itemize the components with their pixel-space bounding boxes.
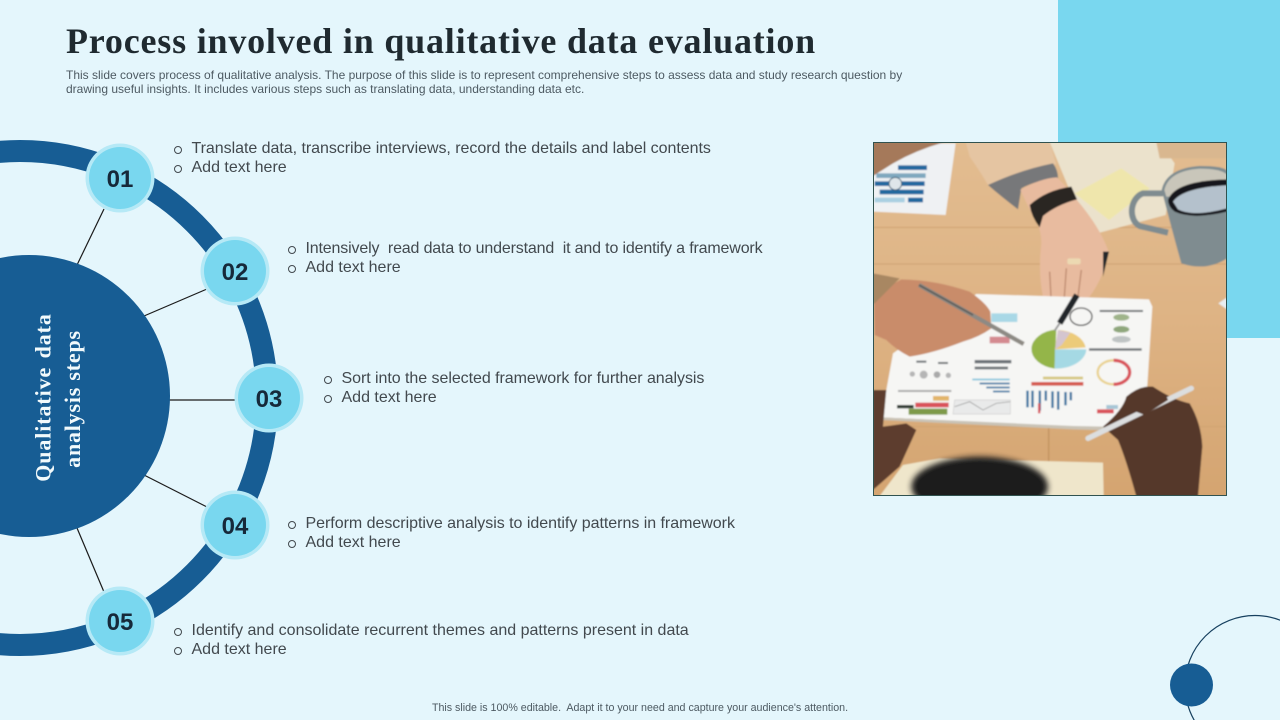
description text bbox=[66, 68, 902, 96]
step badge 03 bbox=[234, 364, 304, 432]
step badge 02 bbox=[200, 236, 270, 306]
top-left report bbox=[873, 143, 956, 215]
decorative circle outline bbox=[1170, 614, 1280, 720]
step badge 04: 04 bbox=[222, 513, 249, 540]
outer ring bbox=[0, 151, 267, 645]
step 4 text bbox=[288, 515, 735, 551]
main chart sheet bbox=[881, 294, 1152, 427]
foreground paper and head bbox=[880, 458, 1104, 496]
pointer pen bbox=[1060, 295, 1077, 323]
white object at right edge bbox=[1218, 297, 1227, 309]
step 3 text: Sort into the selected framework for further analysis bbox=[342, 370, 704, 387]
lower right hand with pen bbox=[1103, 386, 1202, 497]
step 3 text bbox=[324, 370, 704, 406]
step badge 01 bbox=[86, 144, 154, 212]
radial diagram: analysis steps bbox=[60, 330, 85, 468]
photo: hands reviewing charts on a wooden table bbox=[873, 142, 1227, 496]
central label: Qualitative data bbox=[30, 313, 56, 482]
step 4 text: Add text here bbox=[306, 534, 401, 551]
step 2 text: Intensively read data to understand it and to identify a framework bbox=[306, 240, 762, 257]
central circle bbox=[0, 255, 170, 537]
title: Process involved in qualitative data evaluation bbox=[66, 21, 816, 61]
step 4 text: Perform descriptive analysis to identify patterns in framework bbox=[306, 515, 735, 532]
sleeve and cuff bbox=[966, 142, 1056, 185]
decorative corner block bbox=[1058, 0, 1280, 338]
notebook and sticky note bbox=[1050, 142, 1175, 233]
step badge 03: 03 bbox=[256, 386, 282, 413]
step 5 text bbox=[174, 622, 689, 658]
decorative filled circle bbox=[1170, 664, 1213, 706]
description text: drawing useful insights. It includes various steps such as translating data, understanding data etc. bbox=[66, 82, 584, 96]
step badge 05: 05 bbox=[107, 609, 133, 636]
footer note: This slide is 100% editable. Adapt it to your need and capture your audience's attention. bbox=[432, 702, 848, 714]
step 5 text: Identify and consolidate recurrent themes and patterns present in data bbox=[192, 622, 689, 639]
step 1 text: Add text here bbox=[192, 159, 287, 176]
mug bbox=[1162, 166, 1227, 267]
lower left hand bbox=[873, 390, 916, 490]
upper arm and hand bbox=[1020, 177, 1108, 313]
step 1 text: Translate data, transcribe interviews, record the details and label contents bbox=[192, 140, 711, 157]
connector lines bbox=[77, 209, 236, 592]
donut chart bbox=[1098, 360, 1130, 384]
table bbox=[873, 140, 1227, 497]
photo border bbox=[874, 142, 1226, 496]
small chart bars bbox=[1031, 382, 1083, 386]
step 5 text: Add text here bbox=[192, 641, 287, 658]
step 1 text bbox=[174, 140, 711, 176]
radial diagram bbox=[0, 140, 304, 656]
description text: This slide covers process of qualitative analysis. The purpose of this slide is to represent comprehensive steps to assess data and study research question by bbox=[66, 68, 902, 82]
left hand with pen bbox=[874, 279, 991, 357]
pie chart bbox=[1031, 329, 1086, 369]
step 2 text bbox=[288, 240, 763, 276]
step badge 02: 02 bbox=[222, 259, 248, 286]
step badge 04 bbox=[200, 490, 270, 560]
step badge 05 bbox=[86, 586, 154, 656]
step 2 text: Add text here bbox=[306, 259, 401, 276]
step 3 text: Add text here bbox=[342, 389, 437, 406]
step badge 01: 01 bbox=[107, 166, 133, 193]
